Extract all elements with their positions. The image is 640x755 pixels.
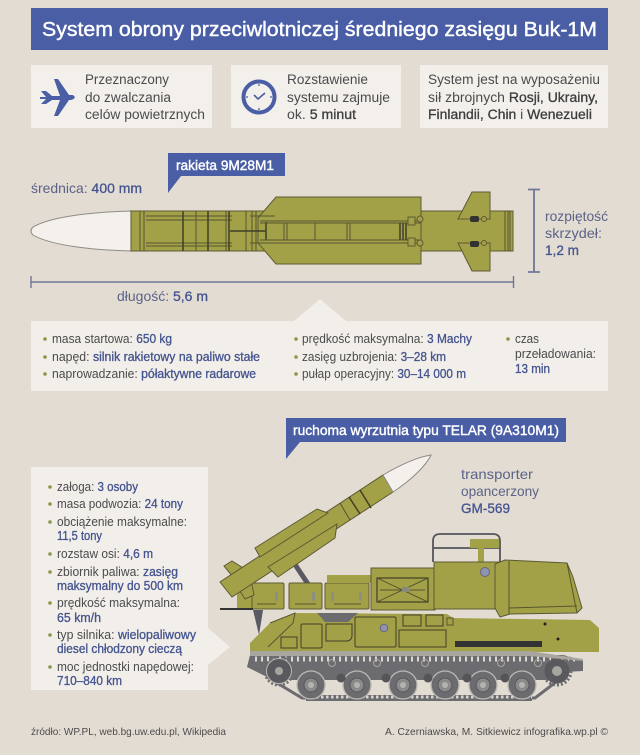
info card: purpose	[31, 65, 212, 128]
label: launcher: ruchoma wyrzutnia typu TELAR (9A310M1)	[293, 422, 559, 438]
info card: deployment time: Rozstawienie	[287, 72, 368, 87]
panel: missile specs: czas	[515, 332, 539, 346]
title	[31, 8, 608, 50]
launch platform boxes	[220, 568, 435, 610]
panel: vehicle specs: moc jednostki napędowej:	[57, 660, 194, 674]
info card: operators: sił zbrojnych Rosji, Ukrainy,	[428, 90, 598, 105]
panel: vehicle specs: 710–840 km	[57, 674, 122, 688]
tracks and running gear	[247, 655, 583, 699]
info card: operators: System jest na wyposażeniu	[428, 72, 600, 87]
panel: vehicle specs	[31, 467, 230, 690]
panel: missile specs: 13 min	[515, 362, 550, 376]
label: launcher	[286, 418, 566, 459]
span label: skrzydeł:	[545, 225, 602, 241]
support arm	[294, 563, 308, 584]
label: rakieta 9M28M1	[168, 153, 285, 193]
length dimension line	[31, 276, 514, 288]
panel: vehicle specs: diesel chłodzony cieczą	[57, 642, 182, 656]
panel: missile specs: prędkość maksymalna: 3 Machy	[302, 332, 473, 346]
diameter label: średnica: 400 mm	[31, 180, 142, 196]
length label: długość: 5,6 m	[117, 288, 208, 304]
transporter label: transporter	[461, 466, 533, 482]
info card: purpose: Przeznaczony	[85, 72, 169, 87]
panel: vehicle specs: załoga: 3 osoby	[57, 480, 139, 494]
panel: vehicle specs: prędkość maksymalna:	[57, 596, 180, 610]
info card: purpose: celów powietrznych	[85, 107, 205, 122]
info card: operators: Finlandii, Chin i Wenezueli	[428, 107, 592, 122]
info card: operators	[420, 65, 608, 128]
label: rakieta 9M28M1: rakieta 9M28M1	[176, 157, 274, 173]
icon: airplane	[40, 79, 75, 116]
transporter label: GM-569	[461, 500, 510, 516]
span label	[545, 208, 608, 258]
cab	[433, 534, 582, 617]
panel: missile specs: masa startowa: 650 kg	[52, 332, 172, 346]
panel: vehicle specs: 65 km/h	[57, 611, 101, 625]
panel: vehicle specs: maksymalny do 500 km	[57, 579, 183, 593]
info card: deployment time: ok. 5 minut	[287, 107, 356, 122]
panel: vehicle specs: typ silnika: wielopaliwowy	[57, 628, 197, 642]
panel: vehicle specs: 11,5 tony	[57, 529, 103, 543]
info card: deployment time	[231, 65, 401, 128]
credits: A. Czerniawska, M. Sitkiewicz infografika.wp.pl ©	[385, 726, 608, 738]
transporter label	[461, 466, 539, 516]
hull	[250, 610, 599, 661]
panel: vehicle specs: rozstaw osi: 4,6 m	[57, 547, 153, 561]
span label: rozpiętość	[545, 208, 608, 224]
transporter label: opancerzony	[461, 483, 539, 499]
panel: vehicle specs: obciążenie maksymalne:	[57, 515, 187, 529]
panel: missile specs	[31, 299, 608, 391]
icon: clock	[244, 82, 274, 112]
source: źródło: WP.PL, web.bg.uw.edu.pl, Wikipedia	[31, 726, 226, 738]
panel: missile specs: przeładowania:	[515, 347, 596, 361]
missile top view	[31, 192, 513, 271]
panel: missile specs: naprowadzanie: półaktywne radarowe	[52, 367, 256, 381]
panel: missile specs: napęd: silnik rakietowy na paliwo stałe	[52, 350, 260, 364]
panel: missile specs: pułap operacyjny: 30–14 000 m	[302, 367, 466, 381]
launcher vehicle illustration	[220, 455, 599, 699]
info card: purpose: do zwalczania	[85, 90, 171, 105]
span dimension line	[528, 190, 540, 272]
info card: deployment time: systemu zajmuje	[287, 90, 390, 105]
title: System obrony przeciwlotniczej średniego zasięgu Buk-1M	[42, 19, 597, 41]
panel: vehicle specs: zbiornik paliwa: zasięg	[57, 565, 178, 579]
panel: missile specs: zasięg uzbrojenia: 3–28 km	[302, 350, 446, 364]
missile on launcher	[220, 455, 431, 599]
span label: 1,2 m	[545, 242, 579, 258]
panel: vehicle specs: masa podwozia: 24 tony	[57, 497, 184, 511]
